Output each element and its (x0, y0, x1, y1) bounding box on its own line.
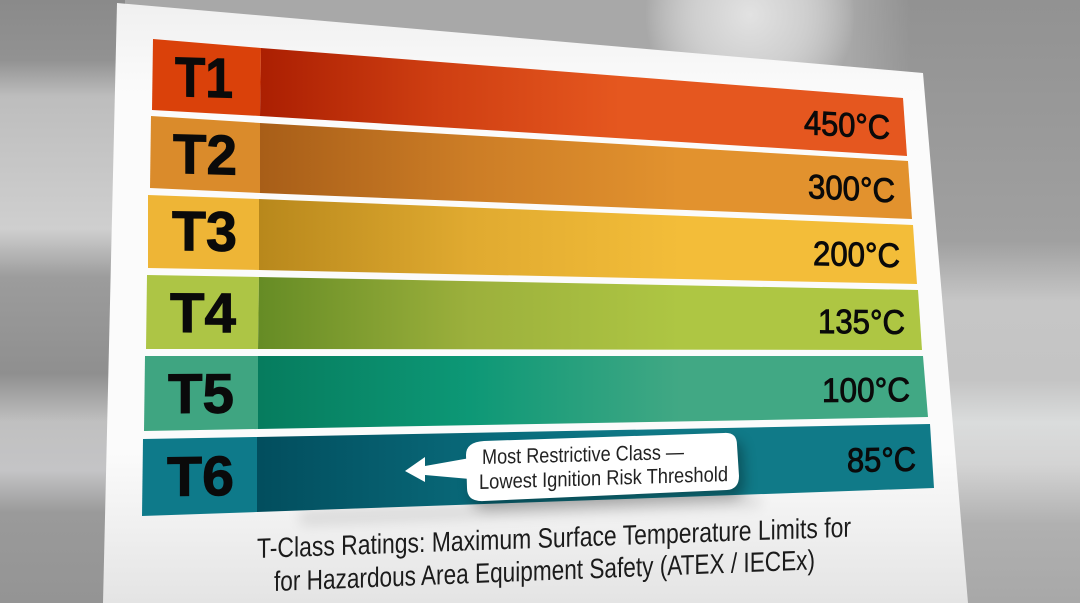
bar: T6 85°C (142, 424, 934, 524)
value: 85°C: 85°C (847, 441, 916, 480)
value: 135°C: 135°C (818, 303, 905, 342)
bar: T4 135°C (146, 275, 922, 350)
value: 100°C: 100°C (822, 371, 910, 410)
label: T2: T2 (173, 122, 237, 187)
callout text: Most Restrictive Class — (482, 441, 684, 469)
icon: arrow (405, 457, 470, 482)
caption: T-Class Ratings: Maximum Surface Temperature Limits for (257, 512, 851, 564)
bar: T5 100°C (144, 356, 928, 431)
label: T3: T3 (172, 199, 237, 263)
callout text: Lowest Ignition Risk Threshold (479, 463, 728, 494)
caption: for Hazardous Area Equipment Safety (ATEX / IECEx) (274, 544, 815, 597)
bar: T2 300°C (150, 116, 912, 219)
bar: T1 450°C (152, 39, 907, 156)
label: T1: T1 (175, 45, 233, 110)
label: T4: T4 (170, 281, 236, 344)
bar: T3 200°C (148, 195, 917, 284)
value: 200°C: 200°C (813, 235, 900, 275)
paper sheet (103, 3, 968, 603)
callout with arrow (405, 433, 744, 508)
label: T5: T5 (168, 362, 234, 425)
value: 300°C: 300°C (808, 168, 895, 210)
value: 450°C: 450°C (804, 104, 890, 147)
callout text (479, 441, 728, 494)
label: T6: T6 (167, 444, 234, 508)
callout box (466, 433, 739, 501)
caption (257, 512, 851, 597)
